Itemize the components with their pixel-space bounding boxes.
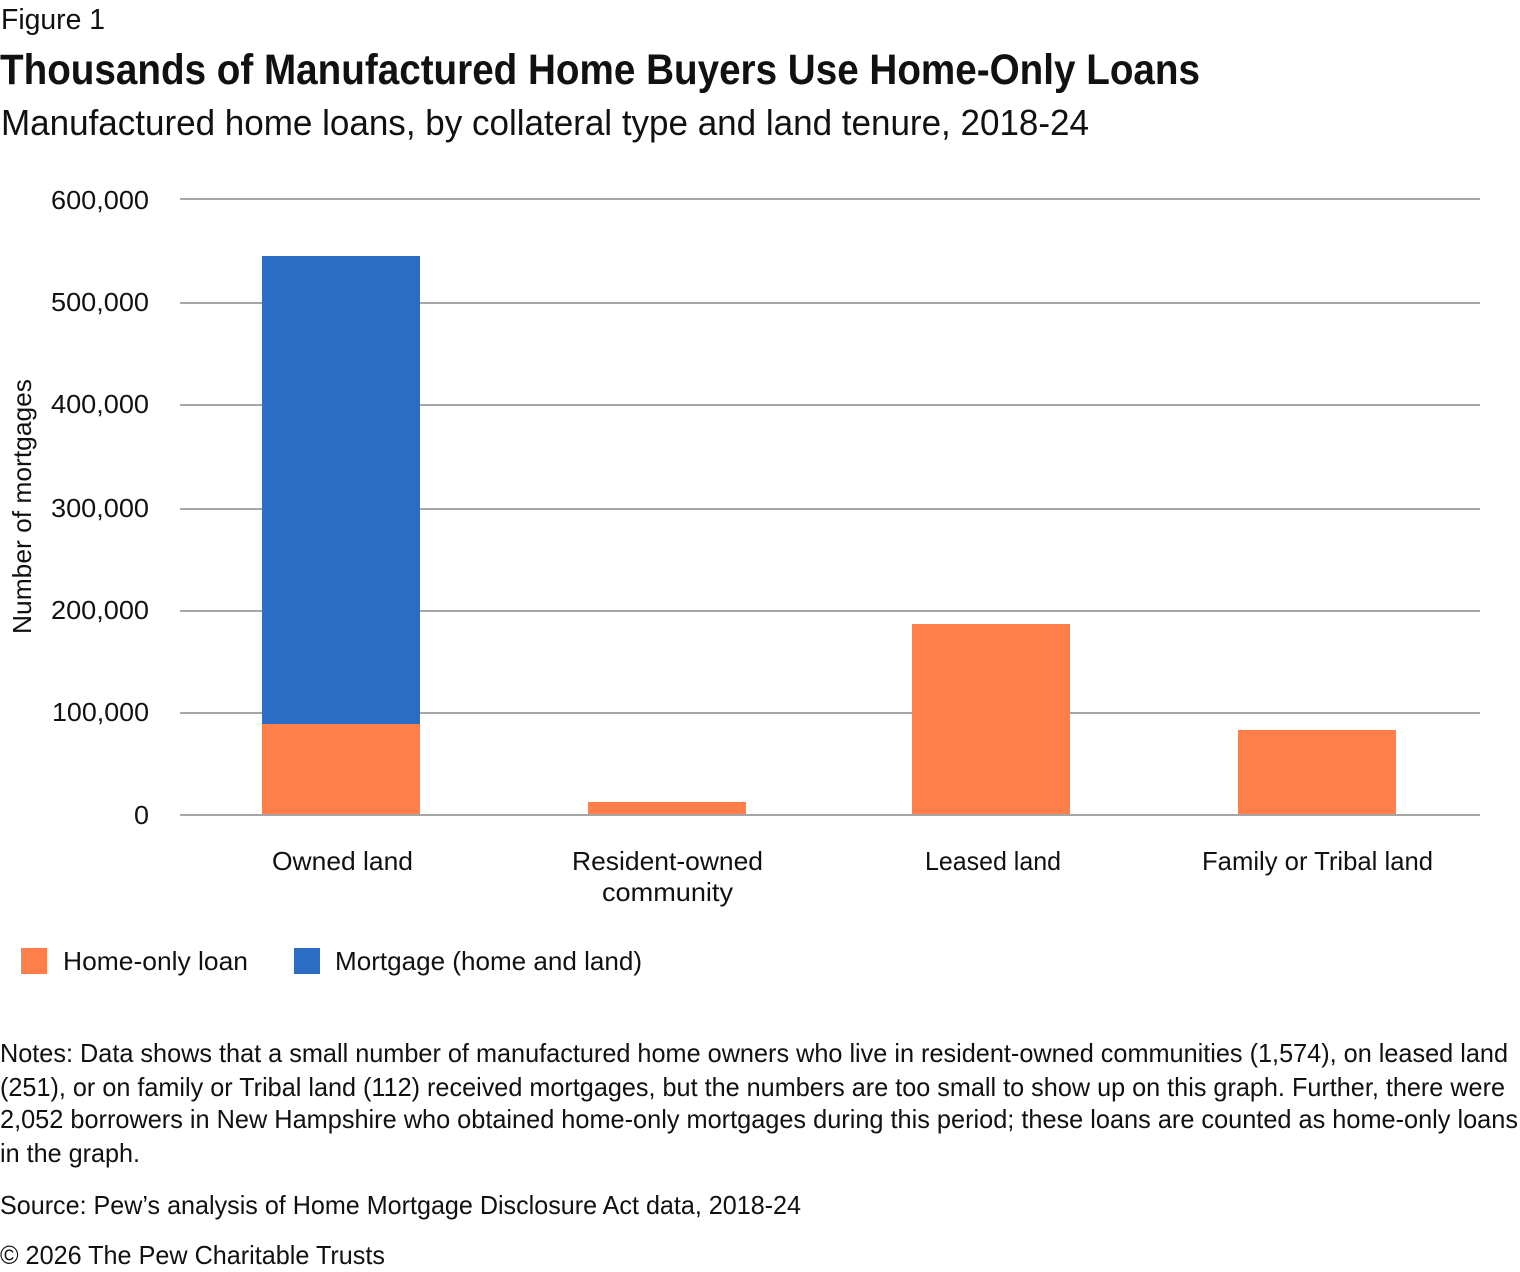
notes (0, 1038, 1518, 1168)
y-axis labels: 600,000 (51, 185, 149, 215)
y-axis labels: 0 (134, 800, 149, 830)
category labels (272, 846, 1433, 907)
y-axis title: Number of mortgages (7, 379, 37, 634)
y-axis labels: 200,000 (51, 595, 149, 625)
bar: leased land, home-only loan (912, 624, 1070, 814)
bar: owned land, mortgage (262, 256, 420, 724)
legend (21, 946, 642, 976)
y-axis labels (51, 185, 149, 830)
y-axis labels: 500,000 (51, 287, 149, 317)
figure label: Figure 1 (1, 4, 105, 36)
title: Thousands of Manufactured Home Buyers Use Home-Only Loans (0, 46, 1200, 94)
notes: 2,052 borrowers in New Hampshire who obtained home-only mortgages during this period; these loans are counted as home-only loans (0, 1104, 1518, 1134)
bar chart (7, 185, 1480, 907)
notes: in the graph. (0, 1138, 140, 1168)
legend: mortgage: Mortgage (home and land) (335, 946, 642, 976)
notes: (251), or on family or Tribal land (112) received mortgages, but the numbers are too small to show up on this graph. Further, there were (0, 1072, 1505, 1102)
category labels: Leased land (925, 846, 1061, 876)
y-axis labels: 300,000 (51, 493, 149, 523)
category labels: community (602, 877, 733, 907)
legend: home-only loan: Home-only loan (63, 946, 248, 976)
bar: owned land, home-only loan (262, 724, 420, 814)
bar: resident-owned community, home-only loan (588, 802, 746, 814)
category labels: Owned land (272, 846, 413, 876)
category labels: Family or Tribal land (1202, 846, 1433, 876)
y-axis labels: 100,000 (52, 697, 149, 727)
copyright: © 2026 The Pew Charitable Trusts (0, 1240, 385, 1270)
subtitle: Manufactured home loans, by collateral type and land tenure, 2018-24 (1, 102, 1089, 143)
y-axis labels: 400,000 (51, 389, 149, 419)
bar: family or Tribal land, home-only loan (1238, 730, 1396, 814)
notes: Notes: Data shows that a small number of manufactured home owners who live in resident-owned communities (1,574), on leased land (0, 1038, 1508, 1068)
source: Source: Pew’s analysis of Home Mortgage Disclosure Act data, 2018-24 (0, 1190, 801, 1220)
category labels: Resident-owned (572, 846, 763, 876)
